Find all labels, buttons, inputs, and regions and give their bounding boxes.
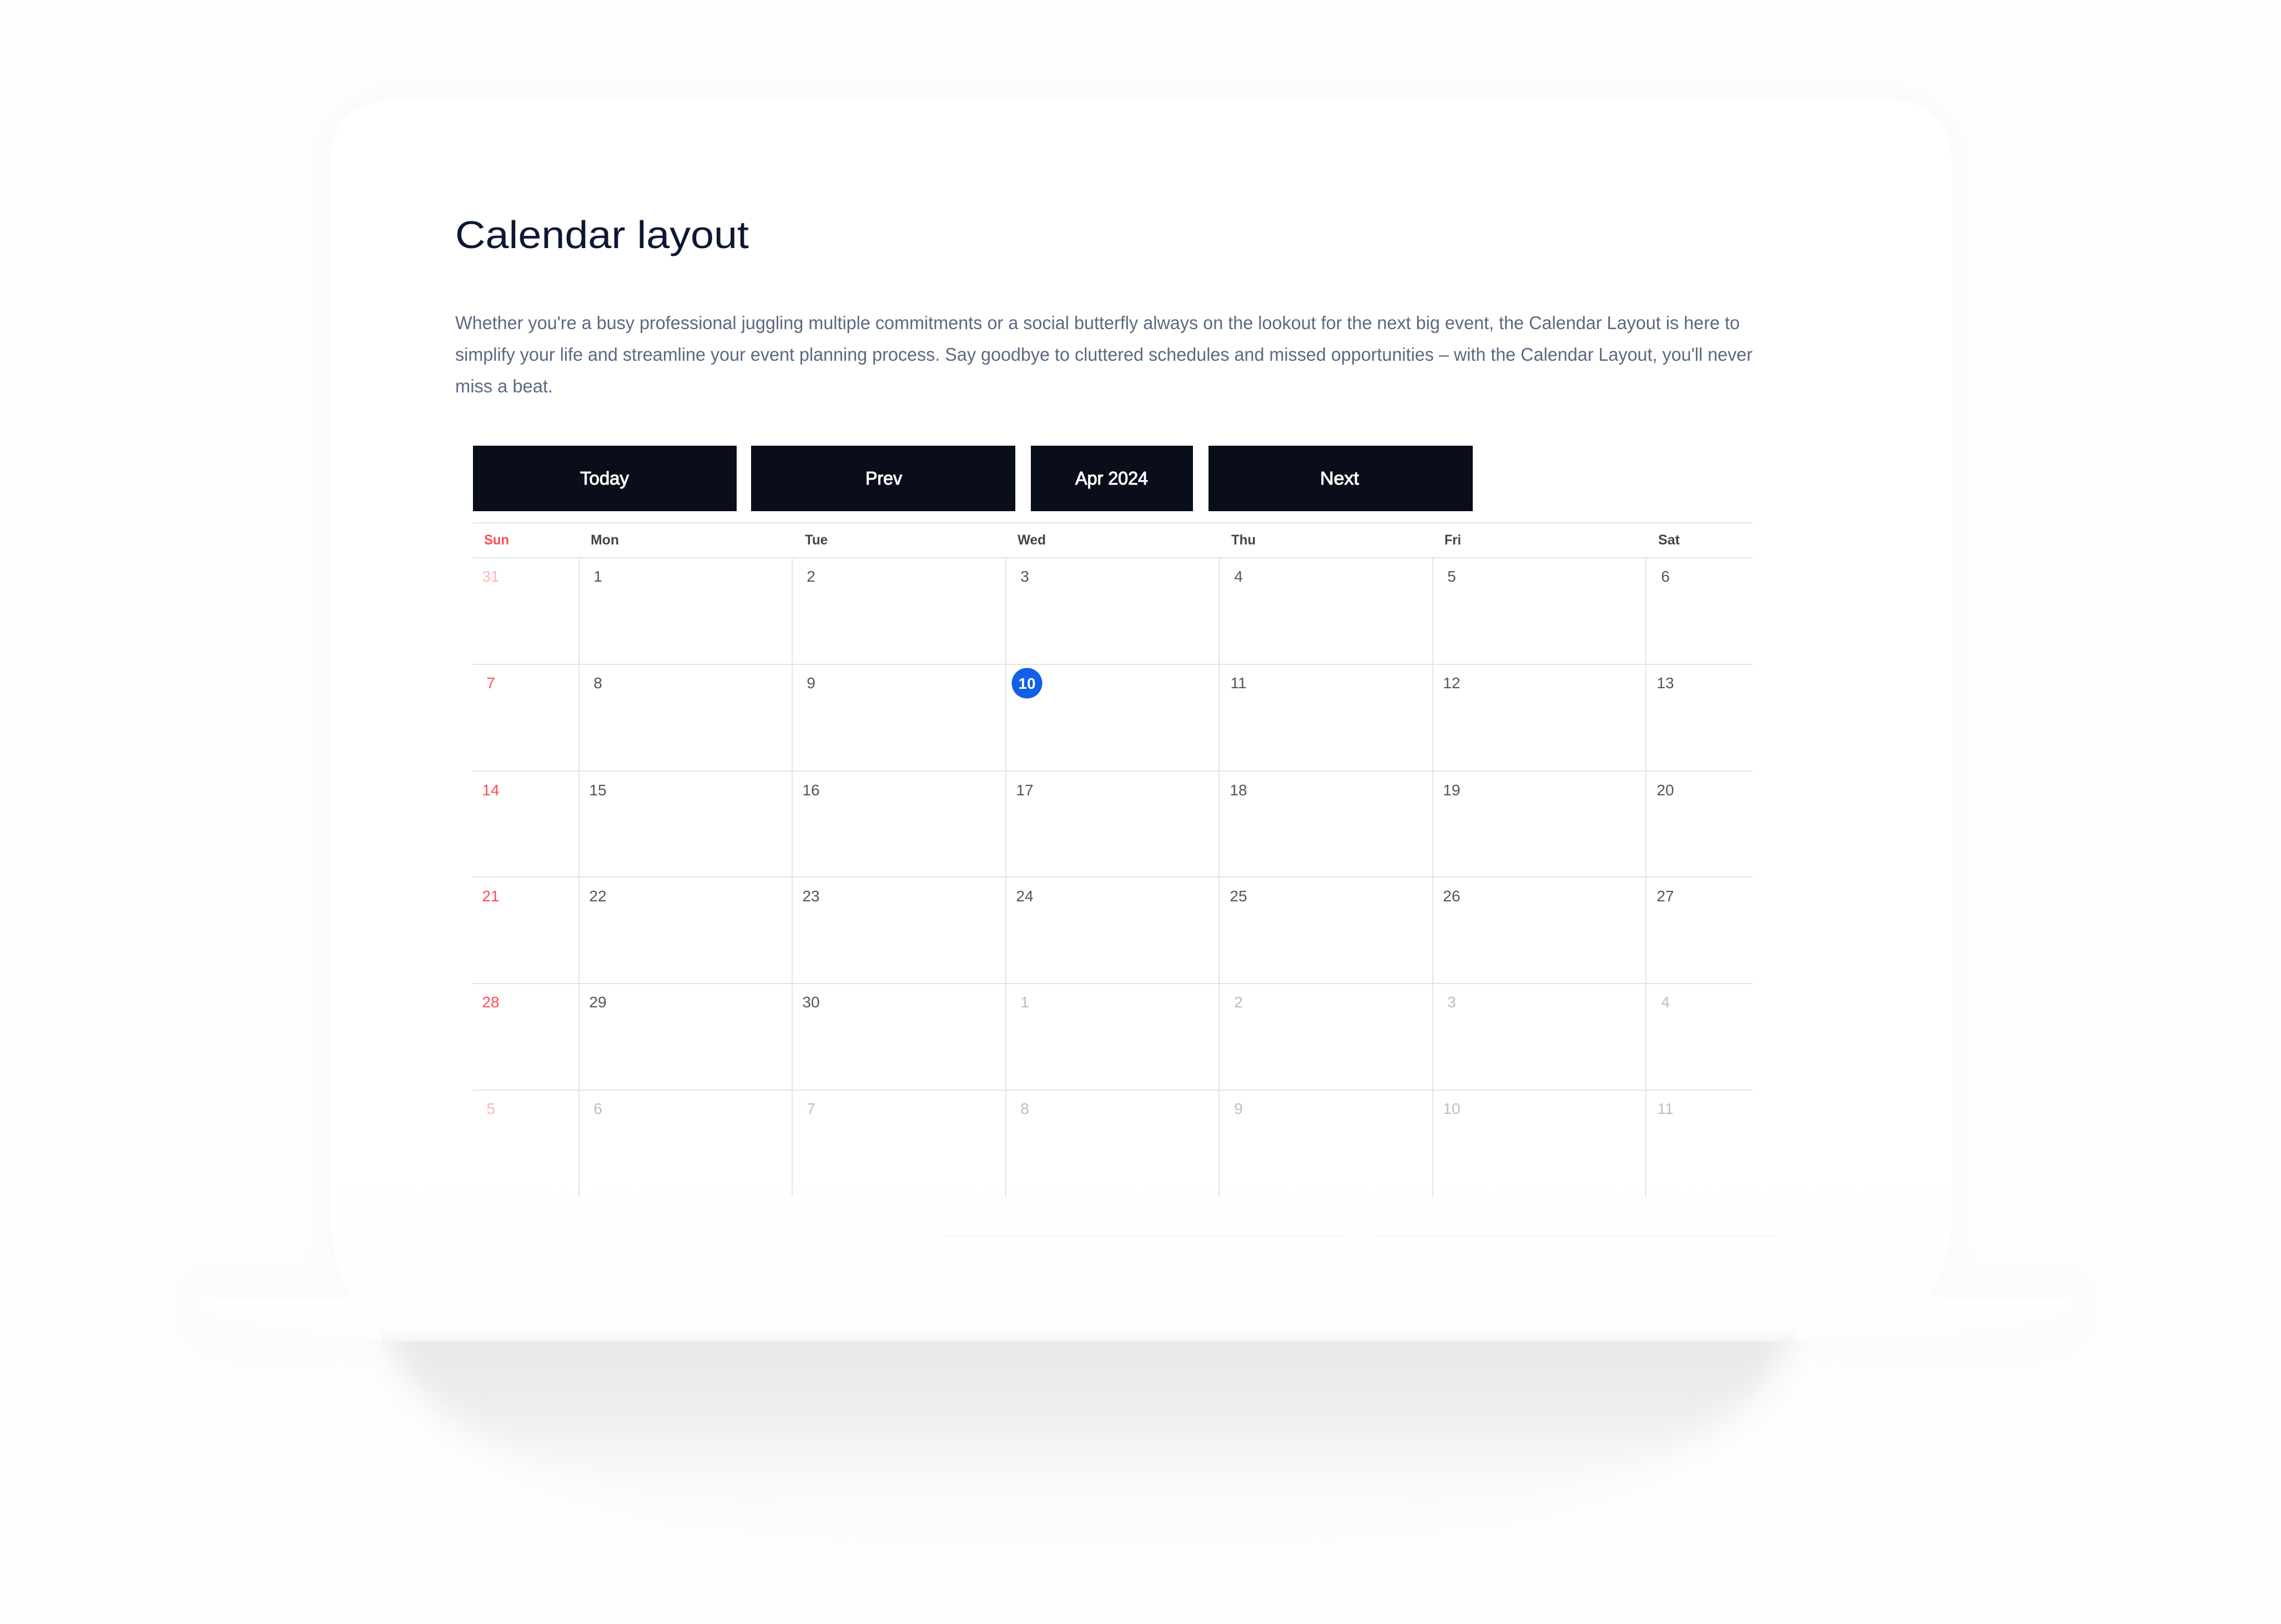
button: next [1209, 446, 1473, 511]
week 1 dates: 6 [1661, 568, 1670, 585]
weekday header row: Fri [1444, 532, 1461, 548]
weekday header row: Sat [1658, 532, 1680, 548]
laptop shadow: upper halo behind the base [172, 1263, 2098, 1340]
description text: Whether you're a busy professional juggling multiple commitments or a social butterfly always on the lookout for the next big event, the Calendar Layout is here to [455, 312, 1740, 333]
week 2 dates: 11 [1230, 674, 1247, 692]
week 1 dates: 3 [1020, 568, 1029, 585]
week 3 dates: 15 [589, 781, 607, 799]
week 3 dates: 14 [482, 781, 500, 799]
week 2 dates: 12 [1443, 674, 1461, 692]
button: month label [1031, 446, 1193, 511]
week 4 dates: 26 [1443, 887, 1461, 905]
week 6 dates: 9 [1234, 1100, 1243, 1117]
weekday header row: Mon [591, 532, 619, 548]
button: prev: Prev [865, 468, 902, 488]
week 6 dates: 11 [1657, 1100, 1674, 1117]
week 3 dates: 16 [802, 781, 820, 799]
weekday header row: Thu [1231, 532, 1256, 548]
weekday header row [484, 532, 1680, 548]
button: today: Today [580, 468, 629, 488]
week 6 dates [486, 1100, 1674, 1117]
week 4 dates: 24 [1016, 887, 1034, 905]
week 5 dates: 30 [802, 993, 820, 1011]
week 6 dates: 10 [1443, 1100, 1461, 1117]
week 5 dates: 29 [589, 993, 607, 1011]
weekday header row: Tue [805, 532, 828, 548]
week 3 dates: 19 [1443, 781, 1461, 799]
week 4 dates: 23 [802, 887, 820, 905]
laptop shadow: floor shadow under the base [387, 1341, 1792, 1455]
base lower shading [381, 1314, 1796, 1341]
week 2 dates: 7 [486, 674, 495, 692]
laptop shadow: halo around the screen [315, 86, 1967, 1307]
week 5 dates: 1 [1020, 993, 1029, 1011]
faint screen reflection line [944, 1235, 1775, 1236]
week 1 dates: 2 [807, 568, 815, 585]
laptop screen panel [330, 100, 1952, 1298]
week 1 dates [482, 568, 1670, 585]
week 5 dates: 4 [1661, 993, 1670, 1011]
weekday header row: Wed [1018, 532, 1046, 548]
week 4 dates: 27 [1656, 887, 1674, 905]
week 3 dates: 18 [1230, 781, 1247, 799]
week 5 dates [482, 993, 1670, 1011]
week 1 dates: 4 [1234, 568, 1243, 585]
button: next: Next [1320, 468, 1359, 488]
week 1 dates: 31 [482, 568, 500, 585]
title: Calendar layout [455, 213, 749, 256]
description text: simplify your life and streamline your event planning process. Say goodbye to cluttered schedules and missed opportunities – with the Calendar Layout, you'll never [455, 344, 1753, 365]
week 2 dates: 8 [593, 674, 602, 692]
calendar grid lines [473, 522, 1753, 1197]
week 5 dates: 2 [1234, 993, 1243, 1011]
week 3 dates: 20 [1656, 781, 1674, 799]
week 6 dates: 6 [593, 1100, 602, 1117]
week 3 dates: 17 [1016, 781, 1034, 799]
button: month label: Apr 2024 [1075, 468, 1148, 488]
week 1 dates: 5 [1447, 568, 1456, 585]
week 5 dates: 3 [1447, 993, 1456, 1011]
today marker: 10 [1011, 668, 1043, 698]
week 2 dates: 9 [807, 674, 815, 692]
description text [455, 312, 1753, 396]
button: prev [751, 446, 1015, 511]
week 6 dates: 8 [1020, 1100, 1029, 1117]
week 1 dates: 1 [593, 568, 602, 585]
week 3 dates [482, 781, 1674, 799]
week 2 dates: 13 [1656, 674, 1674, 692]
laptop base top surface [192, 1288, 2079, 1335]
week 5 dates: 28 [482, 993, 500, 1011]
week 2 dates [486, 674, 1674, 692]
laptop shadow: lower halo of the base [169, 1254, 2101, 1368]
weekday header row: Sun [484, 532, 509, 548]
description text: miss a beat. [455, 376, 553, 396]
week 6 dates: 5 [486, 1100, 495, 1117]
toolbar buttons [473, 446, 1473, 511]
week 4 dates: 22 [589, 887, 607, 905]
week 4 dates [482, 887, 1674, 905]
today marker: 10: 10 [1018, 675, 1036, 692]
button: today [473, 446, 737, 511]
week 4 dates: 21 [482, 887, 500, 905]
week 4 dates: 25 [1230, 887, 1247, 905]
base centre fill [351, 1298, 1930, 1314]
week 6 dates: 7 [807, 1100, 815, 1117]
